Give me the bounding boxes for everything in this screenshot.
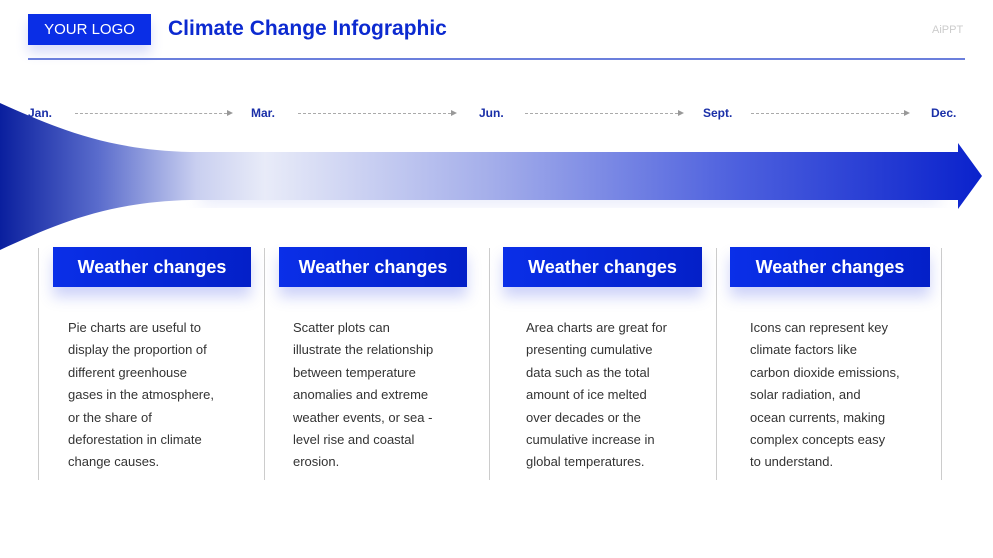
timeline months: Dec. — [931, 106, 956, 120]
panel 1 text: or the share of — [68, 410, 152, 425]
panel 3 heading — [503, 247, 702, 287]
panel 4 text: to understand. — [750, 454, 833, 469]
panel 3 text: over decades or the — [526, 410, 641, 425]
panel 2 text: between temperature — [293, 365, 416, 380]
panel 4 text: ocean currents, making — [750, 410, 885, 425]
panel 3 text: global temperatures. — [526, 454, 645, 469]
panel 2 text: illustrate the relationship — [293, 342, 433, 357]
logo — [28, 14, 151, 45]
panel 3 text: presenting cumulative — [526, 342, 652, 357]
panel 3 text: Area charts are great for — [526, 320, 667, 335]
title: Climate Change Infographic — [168, 17, 447, 40]
panel 3 text: amount of ice melted — [526, 387, 647, 402]
panel 1 text: Pie charts are useful to — [68, 320, 201, 335]
panel 1 text: display the proportion of — [68, 342, 207, 357]
panel 2 text: erosion. — [293, 454, 339, 469]
panel 2 text: anomalies and extreme — [293, 387, 428, 402]
panel 2 text: level rise and coastal — [293, 432, 414, 447]
timeline months: Jan. — [28, 106, 52, 120]
timeline months: Sept. — [703, 106, 732, 120]
panel 4 text: Icons can represent key — [750, 320, 888, 335]
timeline months: Mar. — [251, 106, 275, 120]
panel 4 text: complex concepts easy — [750, 432, 885, 447]
panel 1 text — [68, 320, 214, 469]
panel 2 text: Scatter plots can — [293, 320, 390, 335]
arrow — [0, 103, 982, 250]
brand mark: AiPPT — [932, 24, 963, 36]
panel 2 text — [293, 320, 433, 469]
panel 1 text: different greenhouse — [68, 365, 187, 380]
panel 1 heading — [53, 247, 251, 287]
timeline months: Jun. — [479, 106, 504, 120]
panel 3 text — [526, 320, 667, 469]
timeline months — [28, 106, 956, 120]
panel 4 heading — [730, 247, 930, 287]
panel 1 text: gases in the atmosphere, — [68, 387, 214, 402]
panel 2 text: weather events, or sea - — [293, 410, 432, 425]
panel 4 text — [750, 320, 900, 469]
panel 1 text: deforestation in climate — [68, 432, 202, 447]
panel 4 text: carbon dioxide emissions, — [750, 365, 900, 380]
panel 2 heading — [279, 247, 467, 287]
panel 3 heading: Weather changes — [528, 256, 677, 276]
panel 2 heading: Weather changes — [299, 256, 447, 276]
panel 4 text: solar radiation, and — [750, 387, 861, 402]
logo: YOUR LOGO — [44, 21, 135, 38]
panel 4 heading: Weather changes — [756, 256, 904, 276]
panel 3 text: cumulative increase in — [526, 432, 655, 447]
panel 3 text: data such as the total — [526, 365, 650, 380]
panel 1 text: change causes. — [68, 454, 159, 469]
panel 4 text: climate factors like — [750, 342, 857, 357]
panel 1 heading: Weather changes — [78, 256, 226, 276]
